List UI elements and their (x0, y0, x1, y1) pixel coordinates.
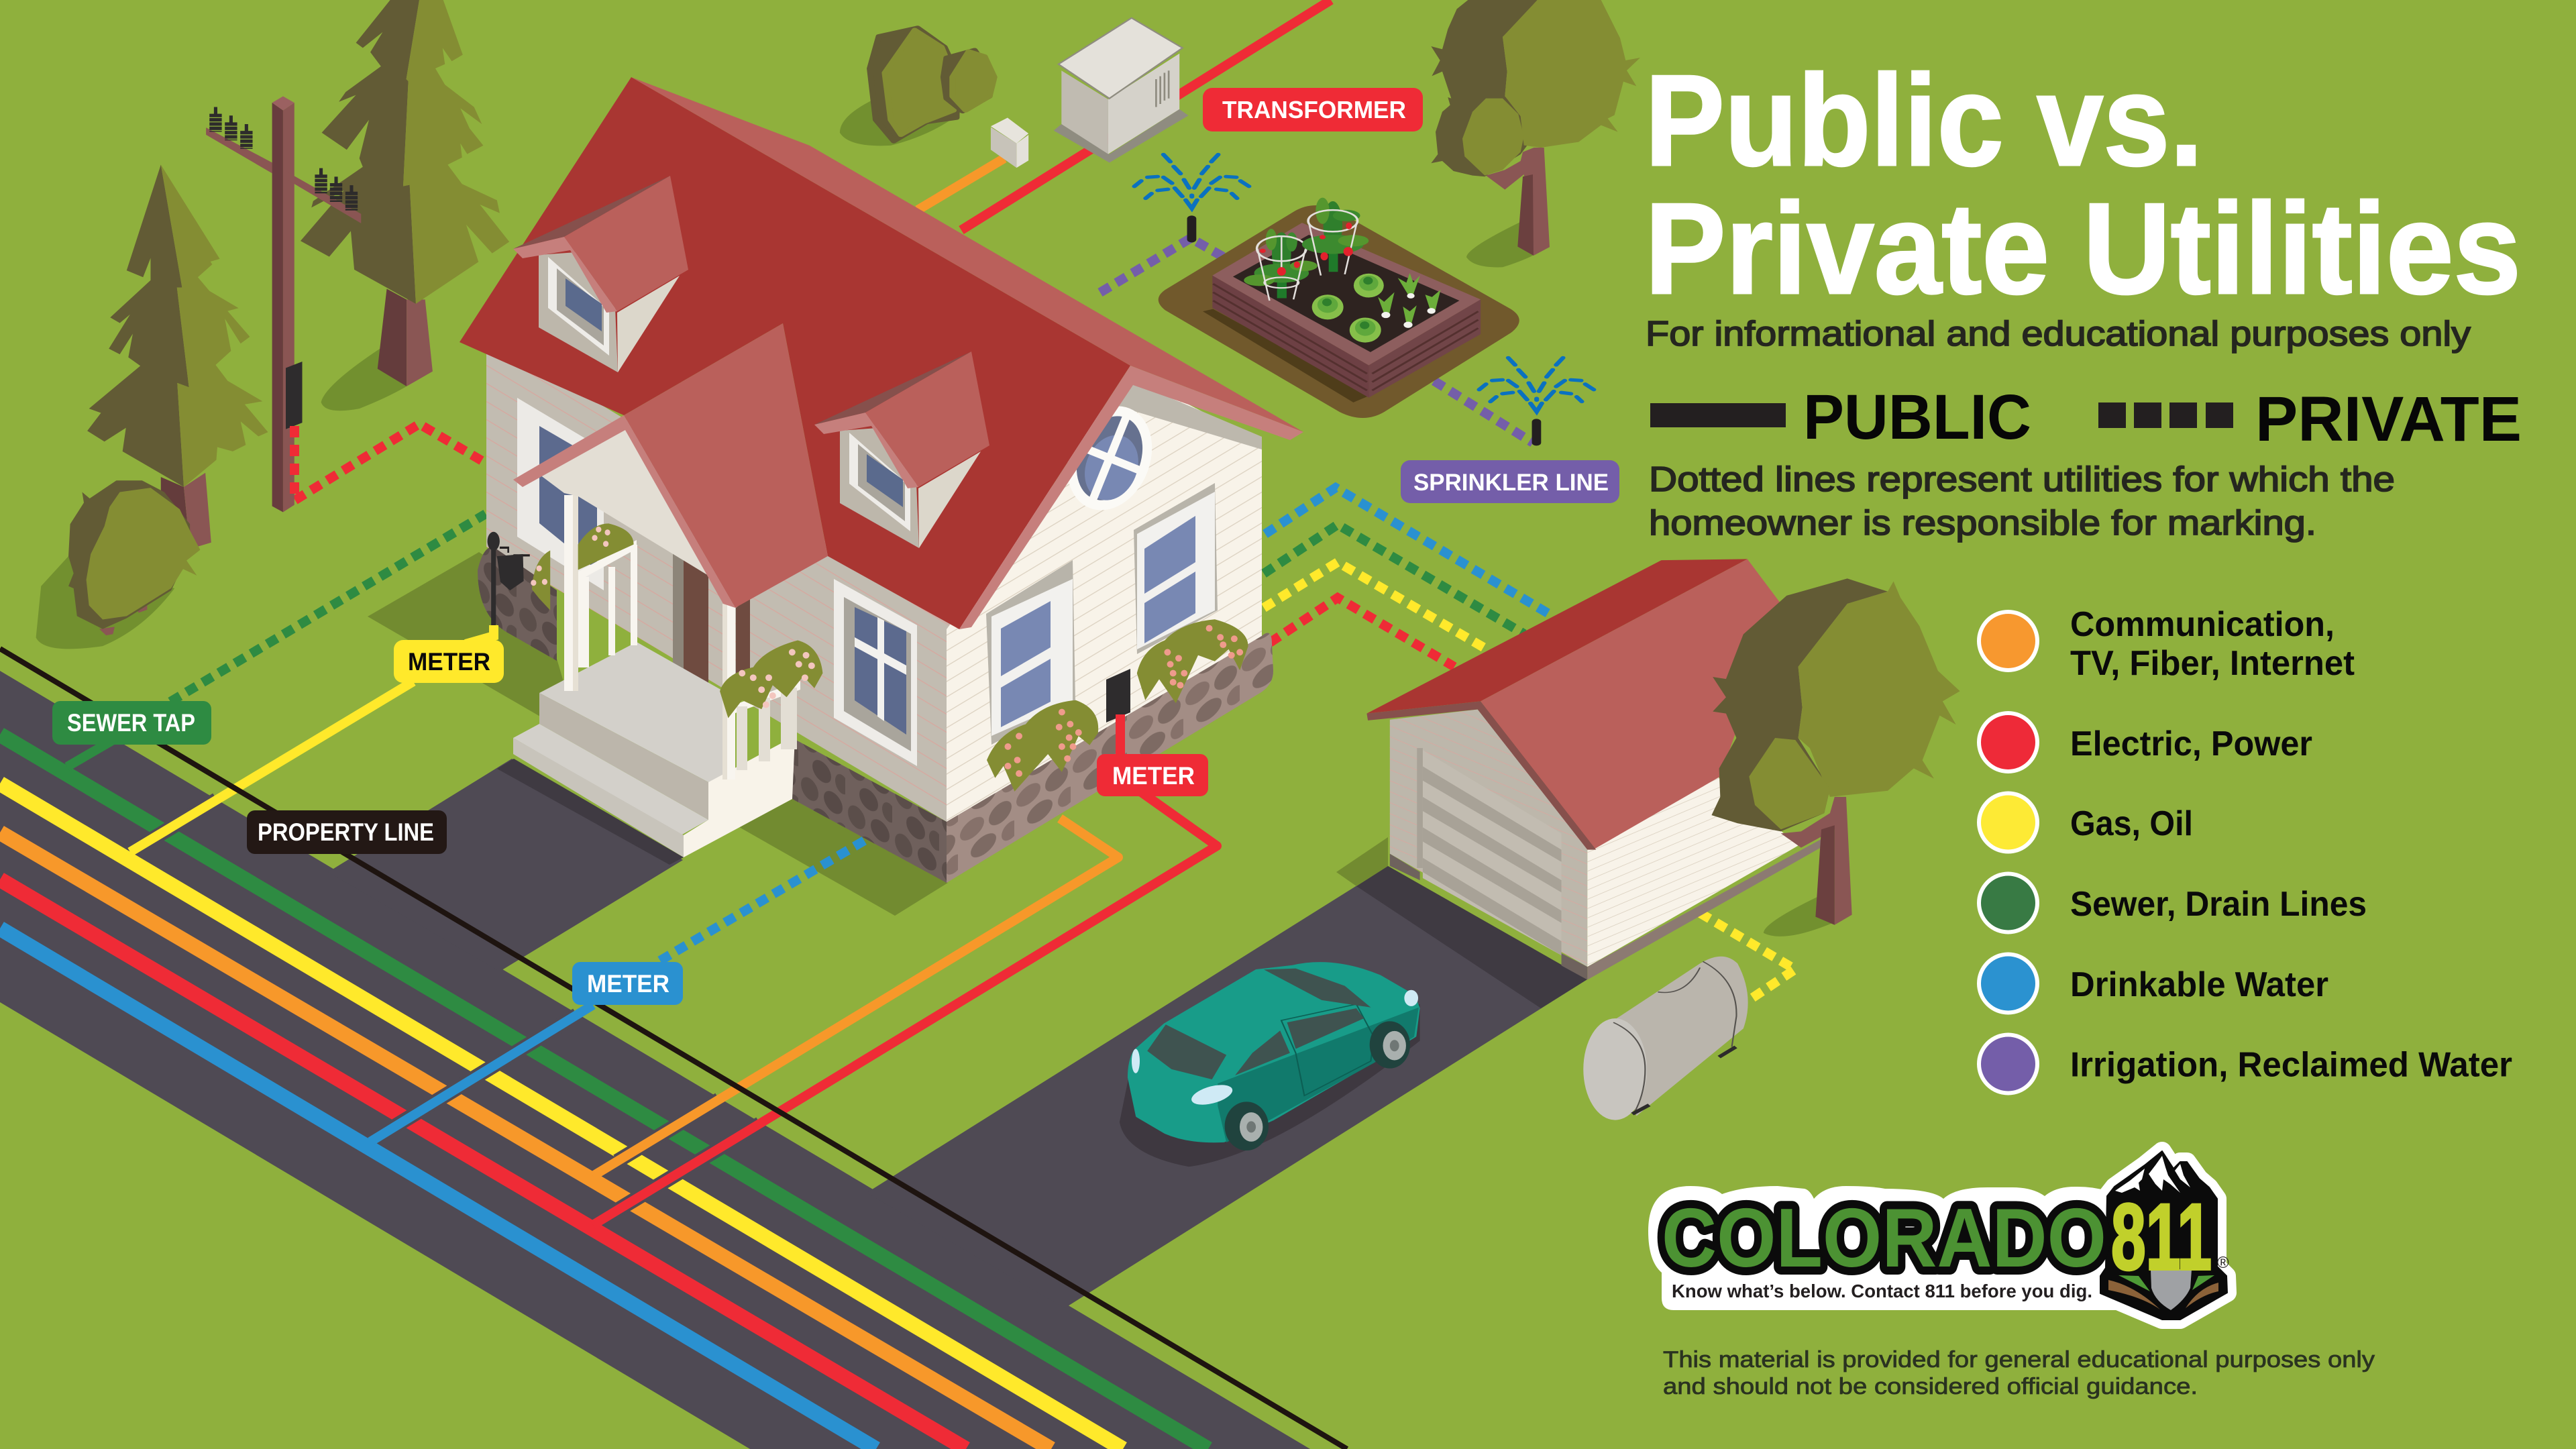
garage driveway (867, 866, 1587, 1308)
electric branch to meter (593, 792, 1217, 1225)
right top tree (1431, 0, 1640, 267)
ground shadows (368, 552, 1388, 916)
label: sprinkler line (1401, 460, 1619, 503)
dotted electric pole to house (294, 424, 484, 500)
logo white backing (1648, 1186, 2137, 1310)
private label: PRIVATE (2255, 384, 2522, 455)
utility branch lines (67, 0, 1331, 1225)
garden soil mound (1159, 205, 1519, 418)
logo snow caps (2115, 1156, 2190, 1193)
dotted gas to tank (1700, 913, 1795, 1000)
private dotted utility lines (170, 238, 1795, 1000)
title: Private Utilities (1645, 176, 2521, 321)
car body (1130, 964, 1417, 1141)
label: sewer tap (52, 701, 211, 745)
logo soil and grass (2108, 1275, 2218, 1309)
property line (0, 649, 1347, 1449)
bed rim (1212, 223, 1481, 366)
disclaimer: This material is provided for general educational purposes only (1663, 1347, 2375, 1373)
porch roof (624, 323, 828, 608)
tomato plant and cage, right (1302, 198, 1368, 276)
right foundation stones (947, 633, 1273, 883)
car shadow (1120, 1004, 1420, 1167)
logo 811: 811 (2111, 1184, 2212, 1289)
water branch to meter (370, 1005, 593, 1142)
upper step riser (539, 693, 708, 820)
public label: PUBLIC (1803, 382, 2031, 453)
lettuces (1312, 274, 1384, 343)
right crossarm (286, 171, 361, 223)
gas main (0, 784, 1123, 1449)
flowering shrubs (531, 523, 1248, 792)
communication branch to house (593, 818, 1118, 1176)
subtitle: For informational and educational purposes only (1646, 315, 2471, 354)
label: transformer: TRANSFORMER (1222, 96, 1406, 123)
title (1645, 48, 2521, 321)
dormer right (814, 352, 989, 548)
transformer box (1054, 18, 1189, 162)
public solid swatch (1650, 403, 1786, 427)
dotted lines explanation (1649, 460, 2395, 543)
walkway step shadow (497, 759, 684, 865)
garage door slats (1423, 766, 1562, 955)
driveway garage shadow (1356, 866, 1587, 1008)
porch side (684, 736, 795, 857)
disclaimer: and should not be considered official guidance. (1663, 1374, 2198, 1399)
label: water meter: METER (587, 970, 669, 998)
front walkway (328, 759, 683, 971)
communication pedestal line (918, 158, 1004, 210)
label: property line: PROPERTY LINE (258, 818, 434, 846)
street (0, 671, 1310, 1449)
legend: sewer: Sewer, Drain Lines (2070, 885, 2367, 924)
bed walls (1212, 276, 1368, 398)
upper left window (517, 398, 604, 590)
car wheels (1225, 1021, 1410, 1150)
tomato plant and cage, left (1244, 229, 1318, 301)
tall pine tree (301, 0, 509, 411)
electric meter box (1106, 669, 1130, 722)
pole shaft (272, 103, 283, 512)
insulators (215, 107, 352, 211)
gas meter stem (466, 625, 494, 644)
logo mountain and shield (2100, 1151, 2227, 1320)
dotted lines explanation: homeowner is responsible for marking. (1649, 504, 2316, 543)
logo tagline: Know what’s below. Contact 811 before you dig. (1672, 1281, 2092, 1301)
twin bushes by transformer (840, 28, 994, 146)
garage tree (1711, 578, 1960, 936)
sewer main (0, 735, 1208, 1449)
legend: irrigation: Irrigation, Reclaimed Water (2070, 1045, 2512, 1084)
garage side wall (1587, 777, 1799, 967)
road casings under branch lines (151, 800, 760, 1210)
sprinkler right (1479, 358, 1594, 445)
electric main (0, 879, 966, 1449)
porch rails left (578, 540, 637, 667)
garage roof (1366, 559, 1748, 714)
porch floor (539, 642, 723, 782)
label: electric meter: METER (1112, 762, 1195, 790)
legend: sewer (1979, 873, 2367, 932)
propane tank (1583, 957, 1748, 1120)
Colorado 811 logo (1648, 1151, 2229, 1320)
garage (1366, 559, 1824, 980)
porch gable wall (540, 430, 718, 590)
garage front wall (1390, 710, 1587, 967)
lower step riser (513, 738, 684, 857)
label: sprinkler line: SPRINKLER LINE (1413, 470, 1609, 496)
dotted water to house (660, 839, 867, 961)
legend: communication (1979, 605, 2355, 683)
porch columns (564, 495, 735, 780)
pole junction box (286, 362, 303, 429)
side window (834, 579, 917, 766)
dotted water to garage (1265, 488, 1552, 616)
roof eave pink strip (959, 366, 1303, 629)
legend: irrigation (1979, 1034, 2512, 1093)
label: water meter (572, 962, 683, 1005)
sewer branch (67, 738, 117, 767)
legend: communication: Communication, (2070, 605, 2334, 644)
label: transformer (1203, 88, 1423, 131)
house (460, 77, 1303, 883)
label: gas meter (394, 640, 504, 683)
tall window right (1134, 483, 1218, 654)
left foundation stones (792, 738, 947, 883)
legend: gas: Gas, Oil (2070, 804, 2193, 843)
porch rails right (735, 681, 800, 770)
porch stone base (478, 547, 557, 661)
left pine tree (87, 165, 268, 549)
electric meter stem (1116, 714, 1125, 758)
round attic window (1052, 393, 1167, 523)
private dashed swatch (2098, 402, 2233, 428)
legend: electric: Electric, Power (2070, 724, 2312, 763)
legend (1979, 605, 2512, 1093)
line style key (1650, 382, 2522, 455)
large window right (986, 560, 1075, 745)
logo shovel (2151, 1264, 2192, 1310)
water main (0, 928, 876, 1449)
sprinkler left (1134, 154, 1249, 242)
teal car (1120, 964, 1420, 1167)
left side wall (486, 335, 953, 822)
onions (1378, 273, 1440, 328)
porch eave strips (513, 415, 735, 608)
car door outlines (1281, 1004, 1374, 1095)
legend: electric (1979, 713, 2312, 771)
label: electric meter (1097, 754, 1208, 796)
gas branch to meter (130, 682, 413, 852)
label: property line (247, 810, 447, 854)
public utility lines in the street (0, 735, 1208, 1449)
dotted irrigation left (1100, 238, 1230, 292)
gable shadow band (1112, 381, 1262, 449)
dotted sewer to house (170, 514, 486, 702)
sprinkler heads (1134, 154, 1594, 445)
raised garden bed (1159, 198, 1519, 418)
pole dotted riser overlay (290, 426, 299, 500)
legend: communication: TV, Fiber, Internet (2070, 644, 2355, 683)
dotted lines explanation: Dotted lines represent utilities for which the (1649, 460, 2395, 499)
front door (673, 553, 750, 684)
roof main (460, 77, 1130, 629)
porch shadow (368, 552, 570, 719)
logo wordmark: COLORADO (1662, 1192, 2106, 1285)
logo registered mark: ® (2217, 1254, 2229, 1272)
logo shield halo (2100, 1151, 2227, 1320)
right front wall (947, 376, 1262, 824)
garage base (1587, 837, 1824, 980)
lower step tread (513, 724, 708, 835)
overhead transformer electric line (961, 0, 1331, 230)
car lights (1132, 990, 1418, 1109)
dotted irrigation right (1418, 371, 1533, 443)
communication pedestal box (991, 117, 1028, 168)
car windows (1147, 969, 1371, 1079)
dotted sewer to garage (1264, 525, 1524, 634)
gas meter (488, 532, 530, 627)
label: sewer tap: SEWER TAP (67, 709, 195, 737)
disclaimer (1663, 1347, 2375, 1399)
label: gas meter: METER (408, 648, 490, 676)
legend: gas (1979, 793, 2193, 852)
legend: water (1979, 954, 2328, 1013)
garage shadow (1336, 837, 1388, 886)
dotted gas to garage (1264, 562, 1489, 651)
dotted electric to garage (1270, 598, 1454, 667)
legend: water: Drinkable Water (2070, 965, 2328, 1004)
left bush (36, 480, 200, 649)
dormer left (513, 176, 688, 372)
communication main (0, 833, 1051, 1449)
house shadow (739, 799, 948, 916)
title: Public vs. (1645, 48, 2203, 193)
soil (1233, 235, 1460, 352)
road and paved areas (0, 671, 1587, 1449)
left crossarm (206, 127, 272, 173)
roof ridge light band (631, 77, 1303, 432)
utility pole (206, 97, 361, 512)
